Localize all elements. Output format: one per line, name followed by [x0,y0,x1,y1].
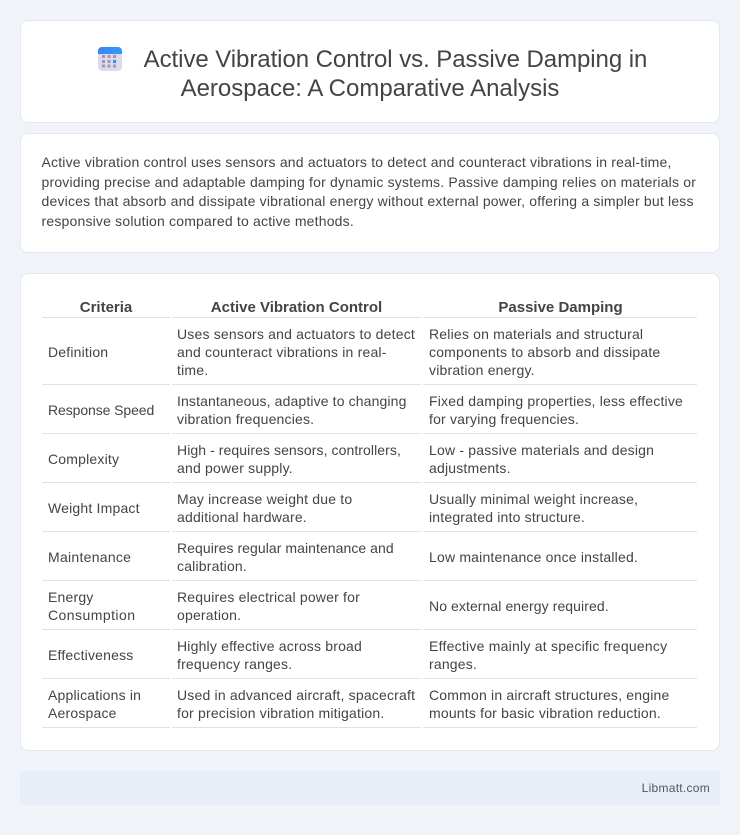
text: calibration. [177,558,247,574]
intro paragraph: providing precise and adaptable damping for dynamic systems. Passive damping relies on materials or [42,174,696,190]
text: Low - passive materials and design [429,442,654,458]
text: vibration frequencies. [177,411,314,427]
row: applications in aerospace [48,687,141,721]
table header: active vibration control: Active Vibration Control [211,299,382,316]
row: definition: Definition [48,344,108,360]
text: operation. [177,607,241,623]
text: No external energy required. [429,598,609,614]
text: Common in aircraft structures, engine [429,687,669,703]
text: time. [177,362,208,378]
footer credit: Libmatt.com [642,781,710,795]
intro paragraph [42,154,696,229]
table header: criteria: Criteria [80,299,132,316]
intro paragraph: Active vibration control uses sensors and actuators to detect and counteract vibrations in real-time, [42,154,672,170]
row: response speed: Response Speed [48,402,154,418]
text: components to absorb and dissipate [429,344,660,360]
text: Relies on materials and structural [429,326,643,342]
text: Fixed damping properties, less effective [429,393,683,409]
text: ranges. [429,656,477,672]
text: Effective mainly at specific frequency [429,638,667,654]
text: May increase weight due to [177,491,352,507]
row: applications in aerospace: Aerospace [48,705,117,721]
text: and power supply. [177,460,293,476]
text: Usually minimal weight increase, [429,491,638,507]
intro paragraph: devices that absorb and dissipate vibrational energy without external power, offering a simpler but less [42,193,694,209]
text: additional hardware. [177,509,307,525]
text: for precision vibration mitigation. [177,705,384,721]
row: complexity: Complexity [48,451,119,467]
panel: comparison table card [20,273,720,751]
panel: title card [20,20,720,123]
row: effectiveness: Effectiveness [48,647,133,663]
table header: passive damping: Passive Damping [498,299,623,316]
text: integrated into structure. [429,509,585,525]
text: frequency ranges. [177,656,292,672]
text: for varying frequencies. [429,411,579,427]
text: High - requires sensors, controllers, [177,442,401,458]
text: Highly effective across broad [177,638,362,654]
icon: calendar grid [98,47,122,71]
text: mounts for basic vibration reduction. [429,705,661,721]
text: vibration energy. [429,362,535,378]
footer bar [20,771,720,805]
text: Requires electrical power for [177,589,360,605]
text: Low maintenance once installed. [429,549,638,565]
text: adjustments. [429,460,511,476]
row: energy consumption: Energy [48,589,94,605]
panel: intro text card [20,133,720,253]
text: Used in advanced aircraft, spacecraft [177,687,415,703]
row: maintenance: Maintenance [48,549,131,565]
row: weight impact: Weight Impact [48,500,140,516]
title: Active Vibration Control vs. Passive Damping in [144,46,647,73]
intro paragraph: responsive solution compared to active methods. [42,213,354,229]
row: applications in aerospace: Applications in [48,687,141,703]
text: Uses sensors and actuators to detect [177,326,415,342]
title [144,46,647,102]
text: Requires regular maintenance and [177,540,394,556]
text: Instantaneous, adaptive to changing [177,393,406,409]
text: and counteract vibrations in real- [177,344,387,360]
row: energy consumption: Consumption [48,607,135,623]
title: Aerospace: A Comparative Analysis [181,75,559,102]
row: energy consumption [48,589,135,623]
